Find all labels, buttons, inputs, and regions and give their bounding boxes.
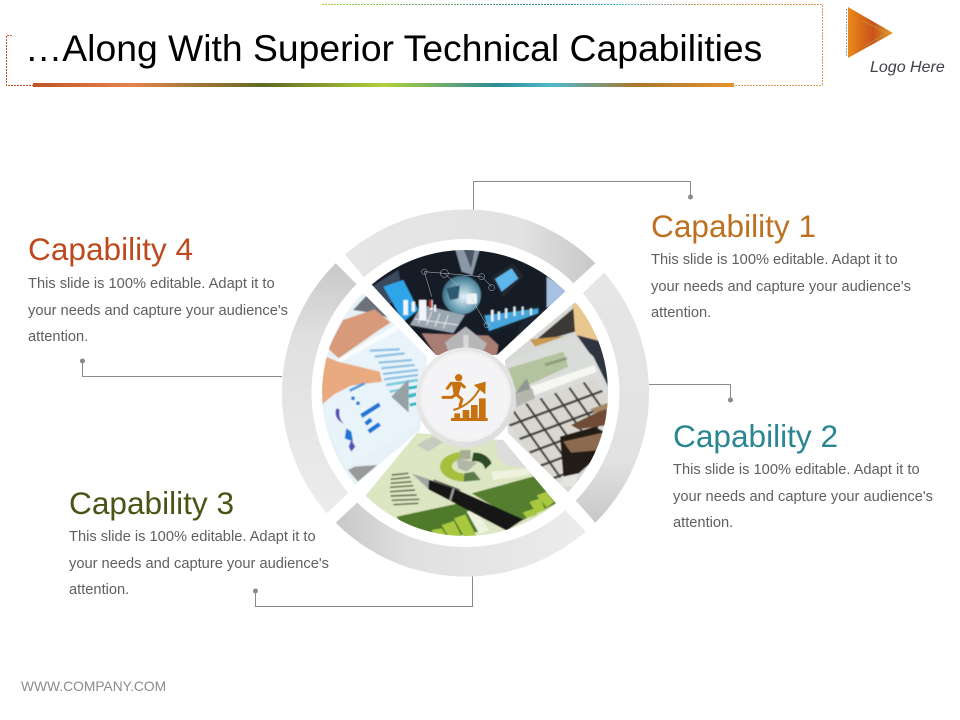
capability 2 text block [673,418,933,531]
capability 1 text block: Capability 1 [651,208,816,244]
photo: tablet with charts [322,293,427,484]
capability 2 text block: This slide is 100% editable. Adapt it to [673,462,920,478]
connector: capability 2 [649,384,733,402]
capability 3 text block: This slide is 100% editable. Adapt it to [69,529,316,545]
ring segments [282,209,649,577]
photo: technology network [372,250,566,355]
capability 4 text block: This slide is 100% editable. Adapt it to [28,276,275,292]
capability 3 text block [69,485,329,598]
connector: capability 1 [474,182,693,210]
capability 3 text block: Capability 3 [69,485,234,521]
runner figure [443,374,464,406]
capability 2 text block: Capability 2 [673,418,838,454]
connector: capability 4 [80,358,282,376]
logo label: Logo Here [870,59,945,76]
capability 4 text block [28,231,288,345]
header frame [6,4,822,86]
connector: capability 3 [253,576,472,606]
icon: logo triangle [846,7,893,58]
capability 1 text block: attention. [651,305,711,321]
icon: runner climbing growth chart [443,374,488,421]
photo: financial report with pen [366,433,556,536]
capability 2 text block: your needs and capture your audience's [673,489,933,505]
capability 1 text block [651,208,911,321]
ring segment: bottom [336,502,586,577]
rising arrow [453,382,486,410]
ring segment: top [345,209,595,283]
photo: calculator keyboard [505,302,608,492]
capability 4 text block: your needs and capture your audience's [28,303,288,319]
center hub [416,348,516,448]
title gradient bar [33,83,734,87]
capability 3 text block: attention. [69,582,129,598]
ring segment: right [576,273,649,523]
title: …Along With Superior Technical Capabilities [25,27,762,69]
footer website: WWW.COMPANY.COM [21,679,166,694]
capability 3 text block: your needs and capture your audience's [69,556,329,572]
growth bars [451,398,488,421]
capability 4 text block: attention. [28,329,88,345]
capability 2 text block: attention. [673,515,733,531]
capability 4 text block: Capability 4 [28,231,193,267]
capability 1 text block: This slide is 100% editable. Adapt it to [651,252,898,268]
ring segment: left [282,263,357,513]
capability 1 text block: your needs and capture your audience's [651,279,911,295]
